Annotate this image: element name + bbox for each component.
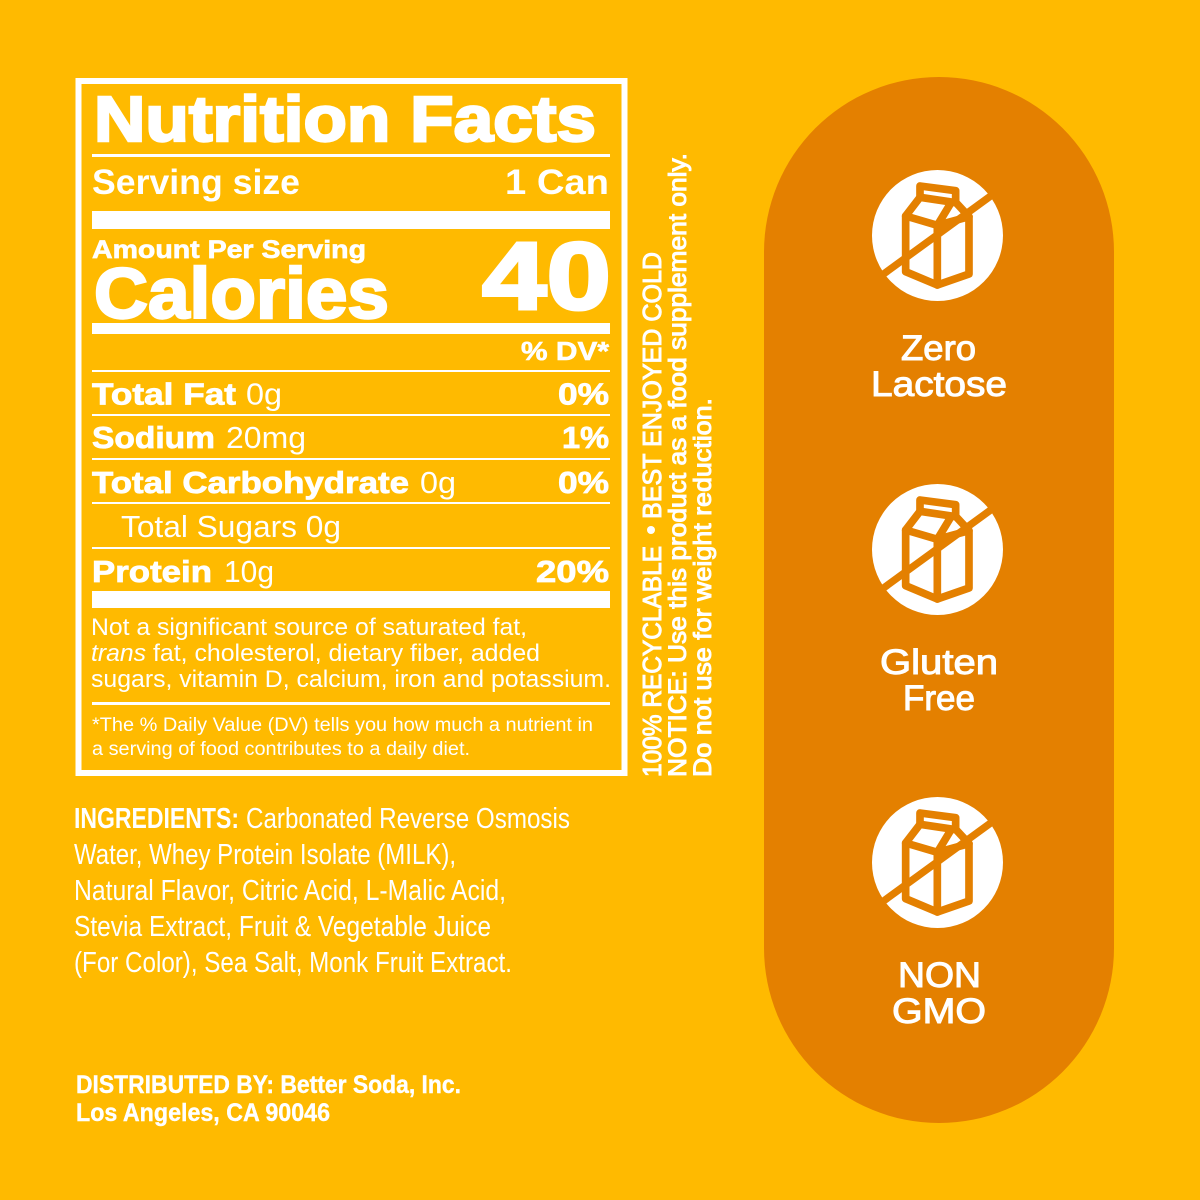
percent daily value header: % DV*: [521, 336, 610, 366]
icon: non gmo crossed carton: [872, 797, 1003, 928]
row: total carbohydrate: Total Carbohydrate: [92, 465, 409, 500]
note: not a significant source: fat, cholesterol, dietary fiber, added: [153, 640, 540, 667]
note: not a significant source: trans: [91, 640, 146, 667]
label: Zero Lactose: [871, 329, 1007, 404]
vertical notice text: Do not use for weight reduction.: [689, 398, 717, 777]
row: total fat: 0g: [246, 376, 282, 412]
row: sodium: [92, 420, 609, 455]
row: protein: 20%: [536, 554, 609, 589]
row: total carbohydrate: [92, 465, 609, 500]
row: total carbohydrate: 0%: [558, 465, 609, 500]
vertical notice text: [637, 153, 717, 777]
ingredients block: Carbonated Reverse Osmosis: [246, 803, 570, 835]
label: Gluten Free: Gluten: [880, 643, 998, 682]
amount per serving: Amount Per Serving: [92, 236, 366, 264]
vertical notice text: 100% RECYCLABLE: [637, 546, 667, 777]
panel: dietary claims pill: [764, 77, 1114, 1123]
distributor block: Los Angeles, CA 90046: [76, 1099, 330, 1127]
note: daily value footnote: a serving of food contributes to a daily diet.: [92, 739, 470, 760]
label: Zero Lactose: Lactose: [871, 365, 1007, 404]
note: not a significant source: sugars, vitamin D, calcium, iron and potassium.: [91, 666, 611, 693]
serving size row: Serving size: [92, 163, 300, 202]
label: Gluten Free: [880, 643, 998, 718]
label: NON GMO: NON: [898, 956, 981, 995]
row: sodium: 20mg: [226, 420, 306, 455]
vertical notice text: NOTICE: Use this product as a food supplement only.: [664, 153, 692, 777]
note: not a significant source: [91, 614, 611, 693]
row: total fat: Total Fat: [92, 376, 236, 412]
row: total carbohydrate: 0g: [420, 465, 456, 500]
heading: Nutrition Facts: Nutrition Facts: [94, 83, 596, 155]
label: NON GMO: [892, 956, 986, 1031]
label: Gluten Free: Free: [903, 679, 975, 718]
distributor block: DISTRIBUTED BY: Better Soda, Inc.: [76, 1071, 461, 1099]
ingredients block: [74, 803, 570, 979]
ingredients block: Stevia Extract, Fruit & Vegetable Juice: [74, 911, 491, 943]
icon: zero lactose crossed carton: [872, 170, 1003, 301]
label frame: [78, 81, 624, 773]
pill background: [764, 77, 1114, 1123]
note: daily value footnote: [92, 715, 593, 760]
icon: gluten free crossed carton: [872, 484, 1003, 615]
ingredients block: Natural Flavor, Citric Acid, L-Malic Acid,: [74, 875, 506, 907]
note: not a significant source: Not a significant source of saturated fat,: [91, 614, 527, 641]
row: protein: 10g: [224, 554, 274, 589]
serving size row: 1 Can: [505, 163, 609, 202]
rule lines: [92, 154, 610, 705]
row: protein: [92, 554, 609, 589]
row: sodium: Sodium: [92, 420, 215, 455]
calories label: Calories: [94, 255, 389, 334]
ingredients block: Water, Whey Protein Isolate (MILK),: [74, 839, 456, 871]
row: sodium: 1%: [562, 420, 609, 455]
label: NON GMO: GMO: [892, 992, 986, 1031]
distributor block: [76, 1071, 461, 1127]
serving size row: [92, 163, 609, 202]
ingredients block: INGREDIENTS:: [74, 803, 239, 835]
label: Zero Lactose: Zero: [901, 329, 976, 368]
row: protein: Protein: [92, 554, 212, 589]
panel: nutrition facts label: [78, 81, 624, 773]
row: total sugars: Total Sugars 0g: [121, 509, 341, 544]
row: total fat: [92, 376, 609, 412]
note: daily value footnote: *The % Daily Value (DV) tells you how much a nutrient in: [92, 715, 593, 736]
ingredients block: (For Color), Sea Salt, Monk Fruit Extract.: [74, 947, 512, 979]
vertical notice text: BEST ENJOYED COLD: [637, 252, 667, 519]
calories value: 40: [482, 223, 611, 330]
row: total fat: 0%: [558, 376, 609, 412]
